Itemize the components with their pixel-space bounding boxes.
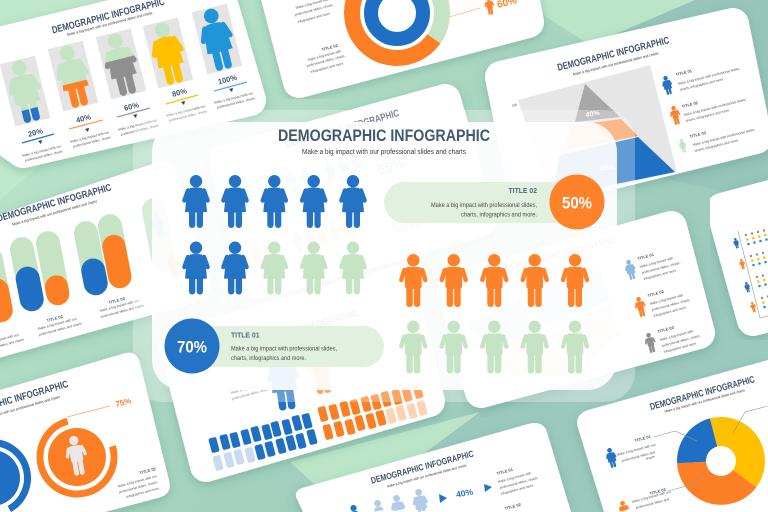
value 40%: 40%: [455, 487, 474, 499]
icon: orange person: [484, 0, 495, 15]
ghost people: [150, 211, 181, 279]
label 20%: 20%: [27, 126, 44, 139]
label 60%: [117, 100, 159, 137]
ghost slide title: DEMOGRAPHIC INFOGRAPHIC: [504, 234, 618, 275]
blue segment bars: [208, 413, 318, 471]
label 80%: professional slides, charts: [168, 109, 207, 123]
text blocks: TITLE 02: [46, 314, 64, 323]
slide: pyramid: [501, 24, 756, 200]
text block title 02: professional slides, charts,: [306, 54, 346, 68]
legend item 01: TITLE 01: [675, 68, 693, 77]
slide: people progression: [296, 423, 571, 512]
text block title 01: Make a big impact with: [497, 471, 532, 484]
callout: title 02: [384, 174, 604, 230]
slide subtitle: Make a big impact with our professional slides and charts: [573, 51, 659, 77]
ghost 65%: 65%: [375, 155, 407, 178]
legend item 01: Make a big impact with professional slides,: [677, 67, 741, 86]
slide: dot chart (far right): [722, 188, 768, 320]
legend item 03: TITLE 03: [689, 130, 707, 139]
orange segment bars: [317, 383, 428, 440]
legend item 01: [624, 252, 681, 281]
text blocks: professional slides and charts: [38, 321, 83, 337]
label 20%: [22, 126, 63, 163]
callout: title 01: TITLE 01: [231, 330, 260, 340]
label 40%: Make a big impact with our: [70, 130, 111, 144]
legend item 02: [634, 289, 691, 318]
legend item 01: Make a big impact with: [639, 256, 674, 269]
text block title 02: Make a big impact with our: [117, 474, 158, 488]
text block: Make a big impact with: [230, 382, 265, 395]
legend item 01: infographics and more.: [643, 268, 678, 281]
ghost title: DEMOGRAPHIC INFOGRAPHIC: [284, 108, 401, 151]
text block: professional slides, charts,: [231, 387, 271, 401]
legend title 01: Make a big impact with our: [616, 442, 657, 457]
label 40%: [69, 112, 111, 149]
label 100%: [214, 73, 255, 110]
leader line: [67, 406, 110, 417]
text block title 01: [496, 467, 539, 496]
legend item 03: professional slides, charts,: [661, 334, 701, 348]
label 80%: Make a big impact with our: [166, 104, 207, 118]
label 60%: 60%: [123, 100, 140, 113]
slide title: DEMOGRAPHIC INFOGRAPHIC: [556, 35, 671, 74]
pyramid layers: 40%: [599, 164, 615, 173]
callout: title 01: charts, infographics and more.: [231, 355, 306, 362]
legend item 02: TITLE 02: [647, 289, 665, 298]
slide subtitle: Make a big impact with our professional slides and charts: [387, 463, 467, 489]
legend title 01: TITLE 01: [634, 434, 652, 443]
figure 100%: [192, 4, 242, 74]
legend item 02: [669, 98, 747, 126]
female pictogram 70%: [184, 175, 365, 294]
label 20%: Make a big impact with our: [22, 144, 63, 158]
legend item 02: Make a big impact with professional slides,: [683, 98, 747, 117]
arrow: [439, 494, 447, 503]
axis label: 100: [511, 103, 518, 108]
bar pair 3 blue: [72, 219, 110, 297]
slide subtitle: Make a big impact with our professional slides and charts: [67, 11, 153, 37]
legend item 02: professional slides, charts,: [651, 298, 691, 312]
slide: circular gauges: [0, 353, 170, 512]
text blocks: TITLE 03: [108, 296, 126, 305]
bar pair 2 orange: [34, 229, 72, 307]
text blocks: Make a big impact with our: [37, 316, 78, 331]
callout: title 01: [164, 318, 384, 374]
blue gauge: [0, 442, 28, 509]
legend item 02: infographics and more.: [653, 305, 688, 318]
text block title 01: TITLE 01: [496, 467, 514, 476]
legend item 03: Make a big impact with: [659, 329, 694, 342]
pyramid layers: 20%: [590, 134, 606, 143]
label 100%: Make a big impact with our: [214, 91, 255, 105]
text block title 02: [117, 466, 160, 499]
legend item 01: [661, 67, 741, 96]
callout: title 01: Make a big impact with professional slides,: [231, 346, 337, 352]
legend item 01: TITLE 01: [637, 252, 655, 261]
slide: nested donut: [270, 0, 528, 82]
legend title 02: TITLE 02: [649, 487, 667, 496]
slide: body shape percent figures: [0, 0, 255, 163]
main white panel: [152, 122, 617, 390]
figure 60%: [96, 29, 146, 99]
figure 40%: [48, 41, 98, 111]
slide: map people (right): [453, 227, 701, 392]
legend item 03: Make a big impact with professional slides,: [692, 128, 756, 147]
text title 02: TITLE 02: [504, 502, 522, 511]
ghost orange people row: [249, 218, 354, 267]
slide: rounded bars: [0, 178, 195, 358]
legend item 02: Make a big impact with: [649, 293, 684, 306]
figure 80%: [143, 18, 193, 88]
leader line: [449, 8, 480, 17]
arrow: [484, 484, 492, 492]
orange gauge: [40, 421, 114, 494]
text blocks: Make a big impact with our: [99, 298, 140, 313]
marker triangles: [38, 88, 233, 144]
outer ring chart: [352, 0, 442, 58]
text block title 01: infographics and more.: [500, 483, 535, 496]
legend item 03: TITLE 03: [657, 325, 675, 334]
label 60%: professional slides, charts: [120, 123, 159, 137]
legend title 01: [605, 434, 657, 469]
leader lines: [654, 406, 768, 491]
bar pair 1: [0, 246, 15, 324]
text blocks: [0, 296, 145, 353]
slide: pictogram bars: [175, 282, 429, 471]
people row: [349, 488, 428, 512]
translucent outer panel: [133, 110, 635, 402]
person blue: [265, 346, 301, 412]
legend title 02: professional slides and: [635, 497, 670, 510]
callout: title 01: 70%: [177, 338, 207, 356]
ghost 60%: 60%: [391, 213, 423, 236]
legend item 03: [678, 128, 756, 153]
callout: title 02: charts, infographics and more.: [461, 212, 537, 218]
pyramid backdrop: [518, 65, 677, 200]
slide title: DEMOGRAPHIC INFOGRAPHIC: [370, 448, 475, 486]
ghost map: [465, 270, 618, 375]
legend item 01: charts, infographics and more.: [679, 77, 725, 92]
person orange: [305, 339, 336, 395]
text block title 02: infographics and more.: [310, 61, 345, 74]
legend item 02: charts, infographics and more.: [685, 108, 731, 123]
label 40%: professional slides, charts: [72, 135, 111, 149]
legend title 01: charts: [645, 455, 655, 461]
label 100%: professional slides, charts: [216, 96, 255, 110]
text block title 02: Make a big impact with: [307, 49, 342, 62]
slide subtitle: Make a big impact with our professional slides and charts: [12, 199, 98, 227]
text block top: [294, 0, 334, 24]
slide: segmented donut: [577, 360, 768, 512]
callout: title 02: Make a big impact with professional slides,: [431, 202, 537, 209]
bar pair 3 orange: [96, 212, 134, 290]
legend item 03: charts, infographics and more.: [694, 138, 740, 153]
text block title 01: professional slides, charts,: [499, 476, 539, 490]
figure 20%: [0, 56, 50, 126]
ghost title: DEMOGRAPHIC INFOGRAPHIC: [243, 308, 360, 351]
text block title 02: [306, 43, 346, 74]
dot rows: [745, 229, 768, 308]
ghost blue people row: [241, 153, 364, 207]
callout: title 02: 50%: [562, 194, 592, 212]
label 80%: 80%: [171, 86, 188, 99]
text block title 02: TITLE 02: [321, 43, 339, 52]
label 100%: 100%: [217, 73, 238, 86]
bar pair 2 blue: [8, 235, 46, 313]
axis: [738, 231, 768, 318]
slide title: DEMOGRAPHIC INFOGRAPHIC: [0, 183, 113, 225]
value 75%: 75%: [115, 396, 132, 409]
main subtitle: Make a big impact with our professional slides and charts: [302, 147, 466, 156]
label 80%: [166, 86, 207, 123]
legend item 02: TITLE 02: [681, 100, 699, 109]
person icons: [733, 237, 757, 313]
label 40%: 40%: [75, 112, 92, 125]
text block top: professional slides, charts,: [294, 3, 334, 17]
pyramid layers: 40%: [585, 110, 601, 119]
legend item 03: infographics and more.: [663, 341, 698, 354]
main title: DEMOGRAPHIC INFOGRAPHIC: [278, 126, 490, 145]
label 20%: professional slides, charts: [24, 149, 63, 163]
text block title 02: professional slides, charts,: [119, 480, 158, 494]
legend item 03: [644, 325, 701, 354]
label 60%: Make a big impact with our: [118, 118, 159, 132]
text block title 02: infographics and more.: [126, 486, 160, 499]
donut chart: [677, 417, 765, 505]
legend title 02: Make a big impact with our: [631, 489, 672, 504]
male pictogram 50%: [401, 254, 587, 374]
callout: title 02: TITLE 02: [508, 186, 537, 195]
legend title 01: professional slides and: [621, 450, 656, 463]
text block top: infographics and more.: [297, 11, 332, 24]
ghost far-right bar: [140, 196, 178, 274]
legend item 01: professional slides, charts,: [641, 261, 681, 275]
slide: behind-panel people (ghost): [225, 100, 480, 283]
text blocks: professional slides and charts: [100, 303, 145, 319]
text block title 02: TITLE 02: [139, 466, 157, 475]
pyramid layers: [552, 84, 675, 197]
legend title 02: [618, 487, 672, 512]
slide subtitle: Make a big impact with our professional slides and charts: [664, 388, 746, 414]
